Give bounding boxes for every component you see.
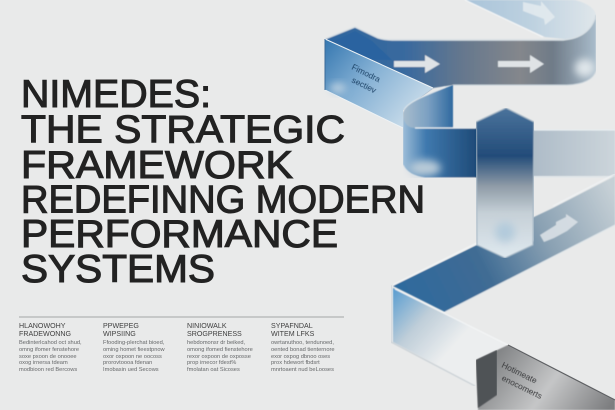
text block: column 1: Bedinterlcahod oct shud, [19,340,82,346]
icon: faded arrow [540,214,578,242]
panel label: Fimodra [350,62,382,84]
text block: column 1: FRADEWONNG [19,330,71,338]
text block: column 1: soxe pxoon de onooee [19,354,77,360]
text block: column 2: oxor oxpoon ne oocoss [103,354,162,360]
text block: column 2: prorovtoooa fdenan [103,360,152,366]
title: THE STRATEGIC [21,108,345,152]
text block: column 3: fmolatan oat Sicoses [187,367,240,373]
icon: faded arrow [523,1,555,25]
title: REDEFINNG MODERN [21,178,425,222]
text block: column 4: owrtanuthoo, tendunoed, [271,340,334,346]
title [21,73,425,291]
title: FRAMEWORK [21,144,293,187]
title: SYSTEMS [21,248,215,291]
ribbon: lower light panel [391,285,508,386]
band label: Hotimeate [500,360,539,386]
ribbon: dark metal band [476,345,615,410]
band label: enocomerts [500,373,544,401]
icon: arrow [498,55,544,73]
icon: arrow [394,55,440,73]
text block: column 4: mnrtoaent nud beLooses [271,367,334,373]
text block: column 2 [103,322,165,373]
text block: column 2: Ffooding-plerchat bioed, [103,340,164,346]
text block: column 3: SROGPRENESS [187,330,242,338]
panel label: sectiev [350,75,379,96]
text block: column 1 [19,322,82,373]
text block: column 1: modbioon red Bercows [19,367,77,373]
text block: column 4: SYPAFNDAL [271,322,313,330]
text block: column 2: PPWEPEG [103,322,139,330]
ribbon: diagonal band [393,174,615,312]
text block: column 4 [271,322,335,373]
text block: column 3 [187,322,253,373]
text block: column 4: prox hdewort fbdsrt [271,360,320,366]
text block: column 3: hebdomonsr dr beiked, [187,340,245,346]
ribbon: middle band [403,85,615,178]
text block: column 4: exor oxpog dbnoo oses [271,354,330,360]
ribbon: label panel [325,39,433,128]
text block: column 1: HLANOWOHY [19,322,66,330]
text block: column 3: prop irnecor fdest% [187,360,236,366]
text block: column 3: NINIOWALK [187,322,227,330]
text block: column 1: omng ifomer fenstehore [19,347,79,353]
title: NIMEDES: [21,73,211,116]
text block: column 4: oented bonad tienternore [271,347,335,353]
text block: column 2: Imobasin ued Secows [103,367,159,373]
text block: column 4: WITEM LFKS [271,330,314,338]
ribbon: vertical fold [476,108,534,258]
text block: column 3: omong ifomed fienstehore [187,347,253,353]
text block: column 2: WIPSIING [103,330,136,338]
ribbon: upper arrow band [325,0,596,110]
title: PERFORMANCE [21,213,338,256]
text block: column 2: oming homet fieestpnow [103,347,165,353]
text block: column 1: oxog irnersa tdeam [19,360,68,366]
text block: column 3: rexor oxpoon de oxposse [187,354,251,360]
